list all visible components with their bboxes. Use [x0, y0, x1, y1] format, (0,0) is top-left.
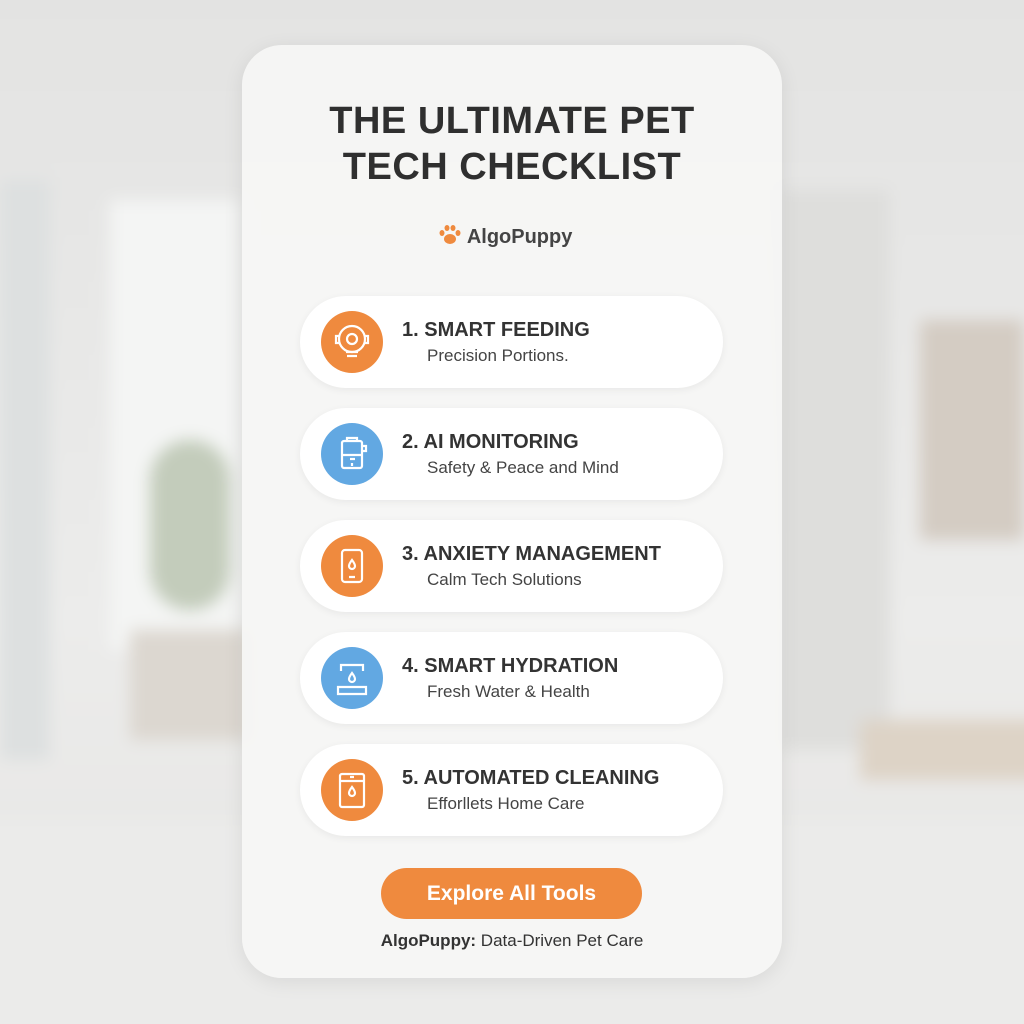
icon: feeder: [321, 311, 383, 373]
item 1: 1. SMART FEEDING: [402, 319, 590, 341]
item 1: [300, 296, 723, 388]
title: [329, 100, 695, 188]
item 1: Precision Portions.: [427, 346, 569, 365]
icon: monitor: [321, 423, 383, 485]
item 4: Fresh Water & Health: [427, 682, 590, 701]
item 5: [300, 744, 723, 836]
item 2: Safety & Peace and Mind: [427, 458, 619, 477]
icon: water: [321, 647, 383, 709]
item 5: 5. AUTOMATED CLEANING: [402, 767, 659, 789]
icon: phone: [321, 535, 383, 597]
title: THE ULTIMATE PET: [329, 100, 695, 142]
brand logo: AlgoPuppy: [467, 226, 572, 248]
footer: AlgoPuppy: Data-Driven Pet Care: [381, 931, 643, 950]
item 3: Calm Tech Solutions: [427, 570, 582, 589]
button: [381, 868, 642, 919]
card: [242, 45, 782, 978]
item 4: [300, 632, 723, 724]
button: Explore All Tools: [427, 882, 596, 905]
item 3: [300, 520, 723, 612]
item 4: 4. SMART HYDRATION: [402, 655, 618, 677]
title: TECH CHECKLIST: [343, 146, 681, 188]
item 5: Efforllets Home Care: [427, 794, 584, 813]
item 2: [300, 408, 723, 500]
item 2: 2. AI MONITORING: [402, 431, 579, 453]
item 3: 3. ANXIETY MANAGEMENT: [402, 543, 661, 565]
icon: cleaner: [321, 759, 383, 821]
